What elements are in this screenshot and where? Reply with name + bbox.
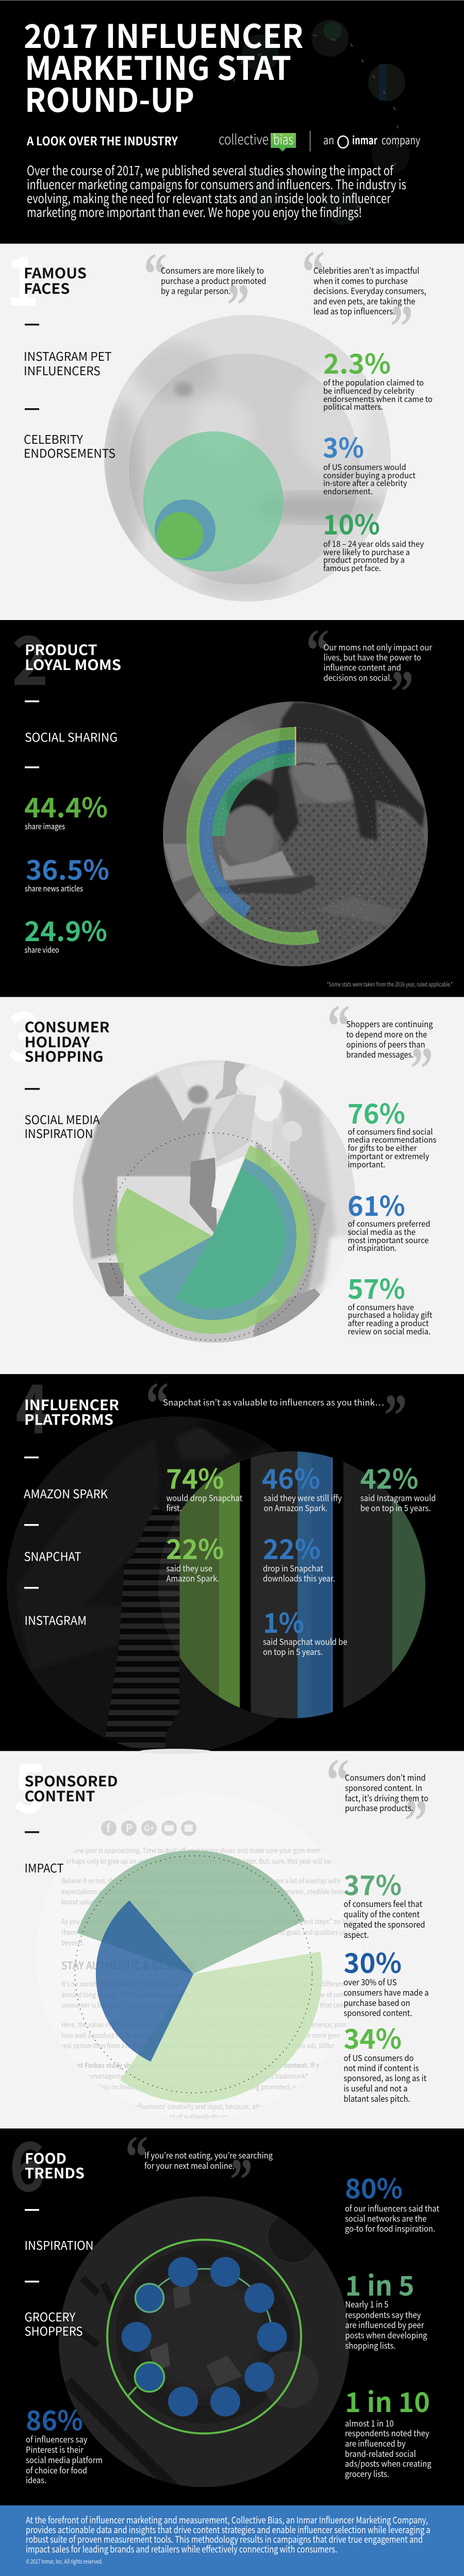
stat 1 in 10: grocery lists. [345,2467,389,2480]
stat 46%: said they were still iffy [264,1491,342,1503]
quote 2: decisions. Everyday consumers, [313,285,426,297]
stat 61%: of inspiration. [347,1242,397,1253]
stat 80%: of our influencers said that [345,2202,439,2214]
stat 42%: said Instagram would [360,1491,436,1503]
quote: ” [410,1035,433,1102]
logo: inmar company [310,131,420,152]
quote 1: purchase a product promoted [161,274,266,287]
heading [25,1016,109,1066]
stat 57% [347,1268,433,1337]
dot ring chart [107,2240,301,2434]
stat 61%: 61% [347,1185,405,1224]
logo: inmar company: an [323,131,334,148]
quote [125,2123,273,2214]
panel: 5 sponsored content [14,1734,429,2121]
label: INSPIRATION [25,1124,93,1142]
stat 80%: social networks are the [345,2212,426,2224]
heading [24,1394,119,1430]
heading [25,639,121,675]
blog text: around long enough that marketers are starting to understand not only how different the type of content [61,1989,355,1999]
stat 61%: social media as the [347,1226,416,1237]
stat 10%: famous pet face. [323,562,381,574]
stat 86%: Pinterest is their [26,2443,84,2455]
intro paragraph [27,161,406,221]
quote: purchase products. [345,1801,413,1814]
stat 74%: would drop Snapchat [166,1491,242,1503]
stat 24.9%: 24.9% [24,910,107,949]
quote: Snapchat isn’t as valuable to influencers as you think… [163,1396,384,1408]
quote: ” [391,658,413,726]
quote: sponsored content. In [345,1781,422,1794]
quote 1: ” [227,272,250,339]
stat 22% snapchat: downloads this year. [263,1572,335,1584]
icon row: social share buttons: G+ [144,1821,155,1834]
stat 74% [166,1458,242,1514]
heading: FAMOUS [24,262,87,283]
photo: plate of food [57,2193,353,2489]
quote 2: Celebrities aren’t as impactful [313,264,420,276]
stat 86%: social media platform [26,2453,103,2466]
quote 2 [302,238,426,360]
stat 42%: 42% [360,1458,419,1497]
copyright: © 2017 Inmar, Inc. All rights reserved. [26,2557,103,2566]
stat 2.3% [323,343,433,412]
stat 76%: of consumers find social [347,1126,433,1137]
panel: 6 food trends [9,2113,439,2489]
photo: faded blog screenshot [61,1820,359,2119]
numeral 5: 5 [14,1734,46,1832]
bar chart in circle [155,1448,428,1721]
blog text: It's no secret that influencer marketing has a major leg-up on traditional advertising on many different [61,1978,345,1988]
quote 2: and even pets, are taking the [313,295,416,307]
stat 37%: of consumers feel that [343,1897,422,1910]
stat 1 in 10: ads/posts when creating [345,2457,432,2469]
heading: LOYAL MOMS [25,654,121,675]
title [24,11,303,122]
stat 30%: consumers have made a [343,1986,429,1998]
boilerplate text: impact sales for leading brands and retailers while effectively connecting with consumers. [26,2542,337,2556]
stat 1 in 5: are influenced by peer [345,2318,424,2331]
stat 1% [263,1602,347,1658]
panel: 3 consumer holiday shopping [8,983,436,1348]
stat 1 in 10 [345,2381,432,2480]
label [25,1088,100,1142]
stat 80%: go-to for food inspiration. [345,2222,435,2234]
stat 37% [343,1864,425,1941]
stat 37%: 37% [343,1864,402,1903]
labels: SHOPPERS [25,2321,82,2339]
stat 76%: important. [347,1158,386,1170]
quote 2: ” [390,293,413,360]
stat 30% [343,1942,429,2018]
stat 1%: 1% [263,1602,304,1641]
stat 86%: 86% [26,2400,83,2439]
stat 22% amazon spark [166,1528,224,1584]
quote: to depend more on the [346,1028,427,1040]
stat 1 in 5: posts when developing [345,2329,427,2341]
label: IMPACT [25,1859,64,1876]
quote 1: Consumers are more likely to [161,264,264,276]
stat 1%: on top in 5 years. [263,1645,323,1658]
stat 57%: after reading a product [347,1317,429,1329]
boilerplate text [26,2513,430,2556]
quote: Consumers don’t mind [345,1771,426,1783]
faint roadmap decoration [229,20,410,225]
quote: influence content and [324,661,401,673]
labels: INFLUENCERS [24,361,101,379]
quote: Our moms not only impact our [324,641,433,653]
blog text: Believe it or not, the goals and expectations you may be setting for yourself have a lot of overlap with [61,1875,340,1885]
stat 3% [323,427,416,497]
stat 30%: purchase based on [343,1996,410,2009]
heading [24,262,87,298]
stat 22% snapchat: drop in Snapchat [263,1562,323,1574]
label: SOCIAL SHARING [25,728,118,745]
panel: 2 product loyal moms [12,607,453,989]
stat 34%: of US consumers do [343,2051,413,2064]
stat 1 in 10: almost 1 in 10 [345,2417,394,2429]
labels: INSTAGRAM PET [24,347,111,364]
faint photo edge below section [139,1749,211,1754]
blog text: brand values should be human-esq. [61,1896,160,1906]
quote: decisions on social. [324,671,392,683]
blog text: them. Here are a couple of ways influencer marketing can help achieve the brand goals and qualities you set [61,1927,359,1937]
stat 74%: 74% [166,1458,224,1497]
stat 36.5%: 36.5% [26,849,109,888]
stat 22% amazon spark: said they use [166,1562,212,1574]
stat 1 in 10: 1 in 10 [345,2381,430,2420]
logo: inmar company: inmar [352,132,378,148]
photo: mother and child [160,698,433,972]
photo: people holding phones [7,1416,278,1750]
quote: for your next meal online. [144,2159,235,2171]
stat 22% snapchat: 22% [263,1528,321,1567]
quote [326,1746,428,1855]
stat 22% amazon spark: Amazon Spark. [166,1572,220,1584]
heading: INFLUENCER [24,1394,119,1415]
stat 80% [345,2168,439,2234]
logo: collective bias [219,128,296,152]
quote: “ [146,1369,169,1437]
quote: ” [405,1787,427,1855]
quote: If you’re not eating, you’re searching [144,2149,273,2161]
heading: TRENDS [25,2163,85,2183]
stat 1 in 5: Nearly 1 in 5 [345,2298,389,2310]
blog text: real person than from a highly polished and manicured advertisement (commercials, radio ads, billbo [61,2040,335,2050]
blog text: level of authenticity you [161,2111,231,2121]
stat 10%: were likely to purchase a [323,546,410,558]
quote 2: when it comes to purchase [313,274,408,287]
blog text: expectations you should be setting for your brand or business. In order to be a dynamic, credible brand [61,1886,348,1896]
blog text: how well a product fits in their own lives. Reading or viewing a product promotion is much more genu [61,2030,342,2040]
stat 2.3%: 2.3% [323,343,391,382]
blog text: romanagement (forced branded copy, trademark™ and registered trademark® [86,2070,309,2081]
stat 37%: aspect. [343,1928,369,1941]
logo: collective bias: collective [219,128,269,148]
photo: shopping couple [72,1057,361,1348]
quote: ” [384,1382,407,1449]
stat 46%: on Amazon Spark. [264,1501,328,1514]
stat 2.3%: of the population claimed to [323,376,424,388]
photo: dog in circle [101,314,392,603]
stat 74%: first. [166,1501,181,1514]
stat 37%: negated the sponsored [343,1918,425,1930]
stat 61%: of consumers preferred [347,1217,430,1229]
labels: AMAZON SPARK [24,1484,108,1502]
stat 76%: for gifts to be either [347,1142,417,1153]
blog text: As you plan for the new year, set goals for yourself in the marketing space – with clear “next steps” on how t [61,1916,358,1926]
blog text: influencers' creativity and input, because, afte [133,2101,263,2111]
label [25,1831,64,1876]
panel: header [24,11,420,225]
stat 44.4%: share images [25,820,65,832]
quote 2: lead as top influencers. [313,305,395,317]
labels: INSPIRATION [25,2236,94,2253]
heading [25,1770,118,1806]
numeral 2: 2 [12,607,48,705]
quote 2: “ [302,238,325,306]
quote: fact, it’s driving them to [345,1792,428,1804]
stat 76%: important or extremely [347,1150,429,1162]
stat 3%: endorsement. [323,485,373,497]
stat 30%: sponsored content. [343,2006,412,2018]
title: MARKETING STAT [25,43,291,90]
pie chart [108,1133,315,1340]
stat 1 in 5 [345,2265,427,2351]
blog text: beyond. [61,1937,84,1947]
labels: CELEBRITY [24,430,84,447]
icon row: social share buttons: P [126,1820,132,1835]
numeral 6: 6 [9,2113,45,2211]
stat 57%: 57% [347,1268,405,1307]
stat 34%: blatant sales pitch. [343,2092,410,2104]
heading [25,2148,85,2183]
stat 34% [343,2018,426,2104]
stat 34%: sponsored, as long as it [343,2071,426,2084]
blog text: Here, the value in influencer marketing lies in its authenticity. An influencers' job is to experience, pror [61,2019,347,2029]
subtitle: A LOOK OVER THE INDUSTRY [26,131,178,149]
quote: “ [125,2123,148,2190]
stat 57%: of consumers have [347,1301,414,1313]
stat 86%: of influencers say [26,2433,88,2445]
stat 3%: in-store after a celebrity [323,477,407,489]
logo: inmar company: company [382,131,420,148]
stat 46%: 46% [262,1458,320,1497]
stat 42%: be on top in 5 years. [360,1501,431,1514]
stat 80%: 80% [345,2168,403,2207]
numeral 3: 3 [8,983,42,1081]
stat 34%: 34% [343,2018,402,2057]
numeral 1: 1 [6,227,39,325]
quote 1: by a regular person. [161,285,231,297]
blog text [61,1845,359,2121]
stat 1 in 10: brand-related social [345,2447,416,2460]
stat 42% [360,1458,436,1514]
labels: SNAPCHAT [24,1547,81,1565]
quote 1 [144,240,266,339]
stat 37%: quality of the content [343,1908,420,1920]
intro paragraph: marketing more important than ever. We hope you enjoy the findings! [27,203,362,221]
stat 2.3%: endorsements when it came to [323,393,433,405]
stat 3%: 3% [323,427,364,466]
labels: INSTAGRAM [25,1611,87,1629]
icon row: social share buttons [101,1819,196,1836]
quote 1: “ [144,240,167,308]
quote: branded messages. [346,1048,414,1060]
stat 10% [323,504,424,574]
dotted arc overlay [187,728,404,944]
stat 57%: purchased a holiday gift [347,1309,433,1320]
labels [24,1457,108,1629]
heading: SPONSORED [25,1770,118,1791]
labels: ENDORSEMENTS [24,444,115,461]
stat 86%: ideas. [26,2473,46,2486]
panel: 1 famous faces [6,227,433,603]
panel: footer [26,2513,430,2566]
numeral 4: 4 [15,1355,49,1453]
quote: “ [326,1746,349,1814]
stat 1 in 5: shopping lists. [345,2339,396,2351]
stat 2.3%: political matters. [323,400,383,412]
title: 2017 INFLUENCER [24,11,303,58]
stat 22% amazon spark: 22% [166,1528,224,1567]
stat 10%: 10% [323,504,380,543]
labels: GROCERY [25,2307,76,2325]
heading: CONSUMER [25,1016,109,1037]
stat 10%: product promoted by a [323,554,405,565]
stat 1 in 10: are influenced by [345,2437,406,2449]
stat 2.3%: be influenced by celebrity [323,384,415,396]
stat 61%: most important source [347,1234,429,1246]
blog text: less inclined to buy into the idea or product that is being promoted, w [99,2081,297,2092]
heading: PLATFORMS [24,1409,113,1430]
stat 36.5%: share news articles [25,882,83,894]
stat 1 in 10: respondents noted they [345,2427,429,2439]
stat 1 in 5: 1 in 5 [345,2265,415,2304]
stat 24.9%: share video [25,943,59,956]
stat 86%: of choice for food [26,2464,87,2476]
title: ROUND-UP [25,75,194,122]
stat 46% [262,1458,342,1514]
blog text: nt Forbes study showed that 43% of millennials rank authenticity over content. If y [77,2060,319,2070]
stat 57%: review on social media. [347,1325,430,1337]
stat 61% [347,1185,430,1253]
quote [306,616,433,726]
stat 3%: of US consumers would [323,461,406,473]
labels [24,324,115,461]
stat 10%: of 18 – 24 year olds said they [323,538,424,549]
radial arc chart [193,727,318,939]
stat 1 in 5: respondents say they [345,2308,421,2320]
heading: CONTENT [25,1785,95,1806]
panel: 4 influencer platforms [0,1355,436,1758]
stat 76%: media recommendations [347,1133,436,1145]
logo: collective bias: bias [273,129,293,148]
icon row: social share buttons: f [106,1819,111,1836]
heading: FOOD [25,2148,67,2168]
quote: lives, but have the power to [324,650,421,663]
heading: SHOPPING [25,1046,103,1066]
quote: “ [327,992,350,1060]
stat 3%: consider buying a product [323,469,416,481]
heading: HOLIDAY [25,1031,90,1052]
blog text: new year is approaching. Time to dust off your tennis shoes and make sure your gym mem [72,1845,321,1855]
quote: ” [230,2146,253,2214]
quote [327,992,433,1102]
blog text: erhaps only to give up on your New Year's Resolutions a month later. But, sure, this year will be [66,1855,331,1866]
stat 34%: not mind if content is [343,2062,419,2074]
quote: Shoppers are continuing [346,1017,433,1030]
quote: “ [306,616,329,684]
stat 76%: 76% [347,1093,405,1132]
stat 22% snapchat [263,1528,335,1584]
nested circle chart [143,431,284,572]
stat 34%: is useful and not a [343,2082,407,2094]
stat 1%: said Snapchat would be [263,1635,347,1648]
label: SOCIAL MEDIA [25,1110,100,1128]
stat 30%: over 30% of US [343,1976,397,1988]
label [25,700,118,768]
blog text: STAY AUTHENTIC & GENUINE [61,1958,195,1973]
quote: opinions of peers than [346,1038,425,1050]
pie chart [75,1850,322,2103]
stat 44.4%: 44.4% [24,787,108,826]
blog text: consumer is between the two, but, subsequently, how different the consumers' reaction to that content [61,1999,355,2010]
stat 30%: 30% [343,1942,402,1981]
stat 86% [26,2400,103,2486]
quote [146,1369,407,1449]
stat 76% [347,1093,436,1170]
labels [25,2209,94,2339]
heading: FACES [24,278,70,298]
heading: PRODUCT [25,639,97,660]
